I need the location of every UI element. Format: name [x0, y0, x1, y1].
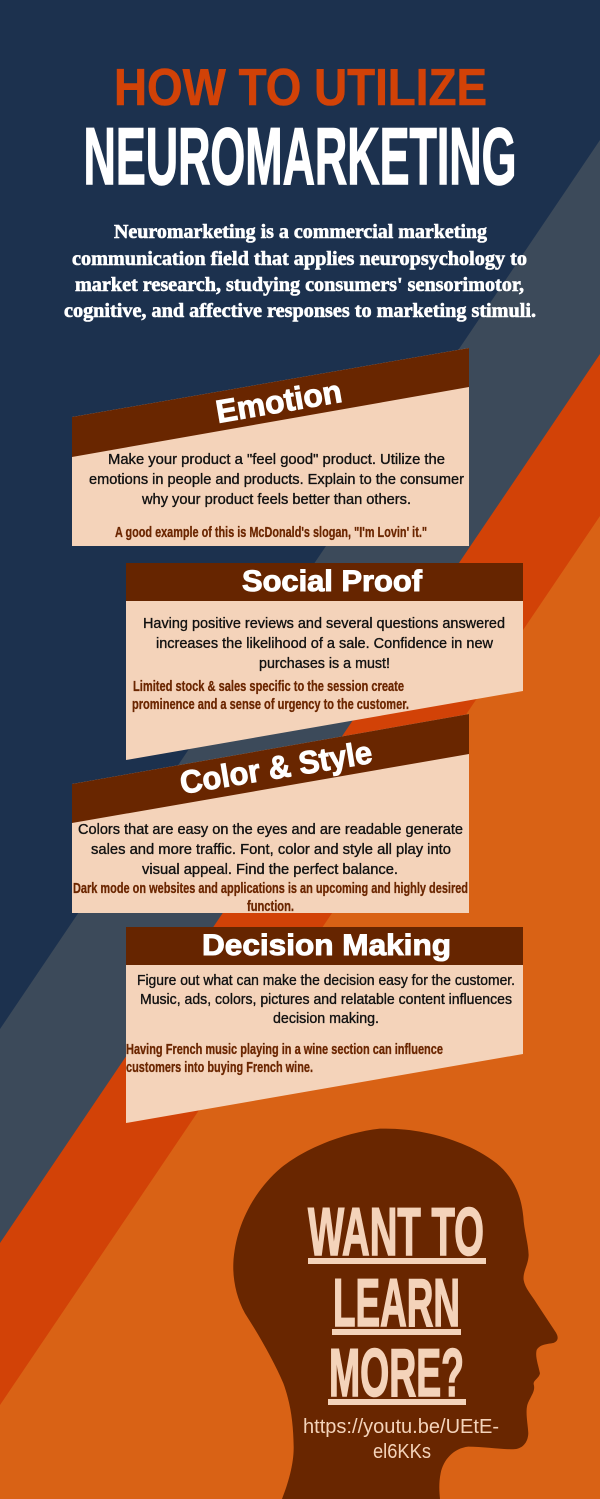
panel background [126, 563, 523, 760]
heading: Color & Style [177, 734, 375, 801]
body text: Figure out what can make the decision easy for the customer. [137, 972, 515, 989]
body text: why your product feels better than others. [141, 491, 411, 508]
call to action heading: MORE? [329, 1335, 464, 1411]
intro text block: Neuromarketing is a commercial marketing [114, 222, 487, 243]
header band [72, 714, 469, 823]
icon: head silhouette [233, 1129, 558, 1499]
video link text: https://youtu.be/UEtE- [303, 1416, 499, 1438]
intro text block: communication field that applies neuropsychology to [72, 249, 527, 270]
heading: Decision Making [202, 929, 451, 962]
example note: Limited stock & sales specific to the session create [133, 679, 404, 695]
body text: sales and more traffic. Font, color and style all play into [91, 841, 451, 858]
body text [143, 615, 505, 672]
example note: customers into buying French wine. [126, 1060, 313, 1076]
body text: Colors that are easy on the eyes and are readable generate [78, 821, 463, 838]
body text: Music, ads, colors, pictures and relatable content influences [140, 991, 512, 1008]
intro text block: cognitive, and affective responses to marketing stimuli. [64, 301, 536, 322]
call to action heading: LEARN [333, 1265, 460, 1341]
example note [126, 1042, 443, 1076]
video link text [303, 1416, 499, 1463]
intro text block: market research, studying consumers' sensorimotor, [75, 275, 524, 296]
body text: Make your product a "feel good" product. Utilize the [108, 451, 445, 468]
body text: decision making. [273, 1010, 379, 1027]
panel: decision making [126, 927, 523, 1123]
panel: social proof [126, 563, 523, 760]
body text [89, 451, 464, 508]
example note: prominence and a sense of urgency to the customer. [132, 697, 409, 713]
example note: A good example of this is McDonald's slogan, "I'm Lovin' it." [115, 525, 427, 541]
body text: increases the likelihood of a sale. Confidence in new [156, 635, 493, 652]
call to action heading [308, 1194, 486, 1411]
heading: Social Proof [242, 565, 423, 598]
header band [126, 563, 523, 601]
panel: emotion [72, 348, 469, 546]
header band [72, 348, 469, 457]
panel background [126, 927, 523, 1123]
body text: purchases is a must! [259, 655, 390, 672]
video link text: el6KKs [373, 1441, 431, 1463]
example note [132, 679, 409, 713]
title line: how to utilize: HOW TO UTILIZE [114, 59, 487, 117]
body text: emotions in people and products. Explain to the consumer [89, 471, 464, 488]
example note: Dark mode on websites and applications is an upcoming and highly desired [73, 881, 468, 897]
intro text block [64, 222, 536, 322]
example note: Having French music playing in a wine section can influence [126, 1042, 443, 1058]
header band [126, 927, 523, 965]
body text [78, 821, 463, 878]
title [84, 59, 516, 202]
body text [137, 972, 515, 1027]
panel background [72, 348, 469, 546]
example note: function. [247, 899, 294, 915]
panel background [72, 714, 469, 913]
example note [73, 881, 468, 915]
panel: color and style [72, 714, 469, 915]
body text: visual appeal. Find the perfect balance. [142, 861, 398, 878]
body text: Having positive reviews and several questions answered [143, 615, 505, 632]
heading: Emotion [213, 373, 344, 430]
